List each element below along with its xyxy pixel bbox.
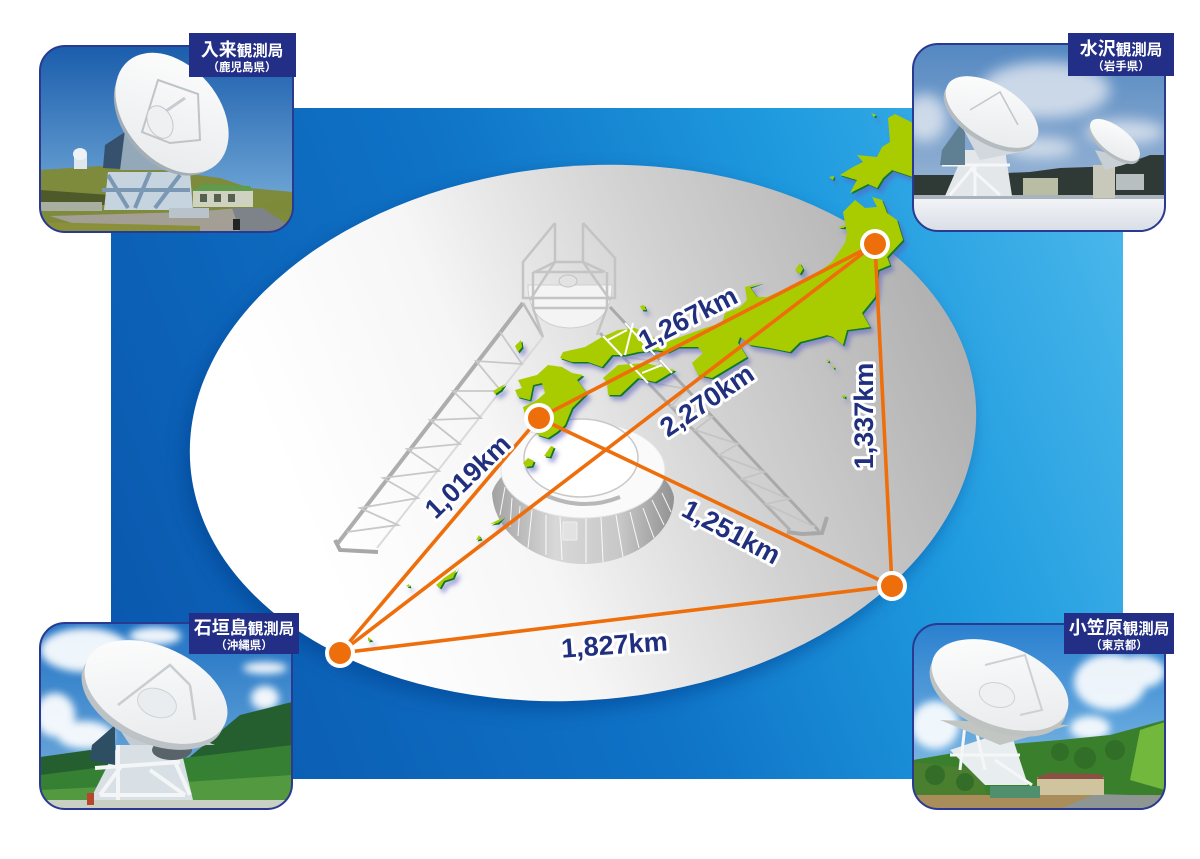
baselines between stations: [340, 244, 892, 653]
lattice over land: [603, 323, 672, 383]
central dome: [492, 419, 674, 564]
station marker: Ogasawara: [877, 571, 907, 601]
photo panel: Ogasawara station: [911, 613, 1174, 809]
photo border: Mizusawa: [913, 44, 1165, 231]
station marker: Iriki: [524, 403, 554, 433]
feed disc: [559, 275, 577, 287]
subreflector frame: [523, 223, 615, 337]
station label: Iriki: [189, 33, 296, 77]
Shikoku: [603, 363, 675, 395]
station label: Mizusawa: [1068, 33, 1174, 76]
distance label: 1,267km: 1,267km: [634, 280, 742, 356]
photo: Ogasawara antenna: [911, 621, 1165, 809]
photo: Mizusawa antennas: [903, 44, 1165, 231]
photo panel: Mizusawa station: [903, 33, 1174, 231]
station marker: Mizusawa: [860, 229, 890, 259]
station marker: Ishigaki: [325, 638, 355, 668]
ellipse shadow: [161, 140, 993, 742]
photo border: Iriki: [40, 46, 293, 232]
distance label: 1,019km: 1,019km: [419, 429, 517, 524]
station label: Ogasawara: [1064, 613, 1174, 654]
Kyushu: [515, 365, 587, 438]
Honshu: [560, 197, 903, 378]
station label: Ishigaki: 石垣島観測局: [194, 618, 294, 638]
distance label: 2,270km: 2,270km: [654, 358, 760, 443]
subreflector bowl: [528, 285, 612, 328]
left lattice arm: [335, 303, 543, 552]
photo border: Ogasawara: [913, 624, 1165, 809]
distance label: 1,827km: 1,827km: [560, 626, 669, 664]
photo: Ishigaki antenna: [35, 619, 292, 809]
station label: Ishigaki: [189, 613, 299, 654]
station label: Ishigaki: （沖縄県）: [215, 638, 273, 652]
blue background panel: [111, 108, 1123, 779]
station label: Ogasawara: （東京都）: [1090, 638, 1148, 652]
station label: Iriki: 入来観測局: [201, 40, 283, 60]
right lattice arm: [600, 307, 827, 534]
distance label: 1,251km: 1,251km: [677, 494, 785, 570]
Hokkaido: [840, 114, 930, 193]
photo border: Ishigaki: [40, 623, 292, 809]
station label: Mizusawa: 水沢観測局: [1080, 39, 1162, 59]
main dish ellipse: [167, 133, 999, 733]
distance label: 1,337km: 1,337km: [849, 363, 879, 469]
map of Japan: [326, 113, 930, 661]
photo panel: Iriki station: [40, 31, 296, 232]
station label: Mizusawa: （岩手県）: [1092, 59, 1150, 73]
antenna illustration: [335, 223, 827, 564]
station label: Iriki: （鹿児島県）: [208, 60, 276, 74]
photo panel: Ishigaki station: [35, 613, 299, 809]
photo: Iriki antenna: [40, 31, 293, 232]
station label: Ogasawara: 小笠原観測局: [1069, 617, 1169, 638]
small islands: [326, 113, 876, 661]
